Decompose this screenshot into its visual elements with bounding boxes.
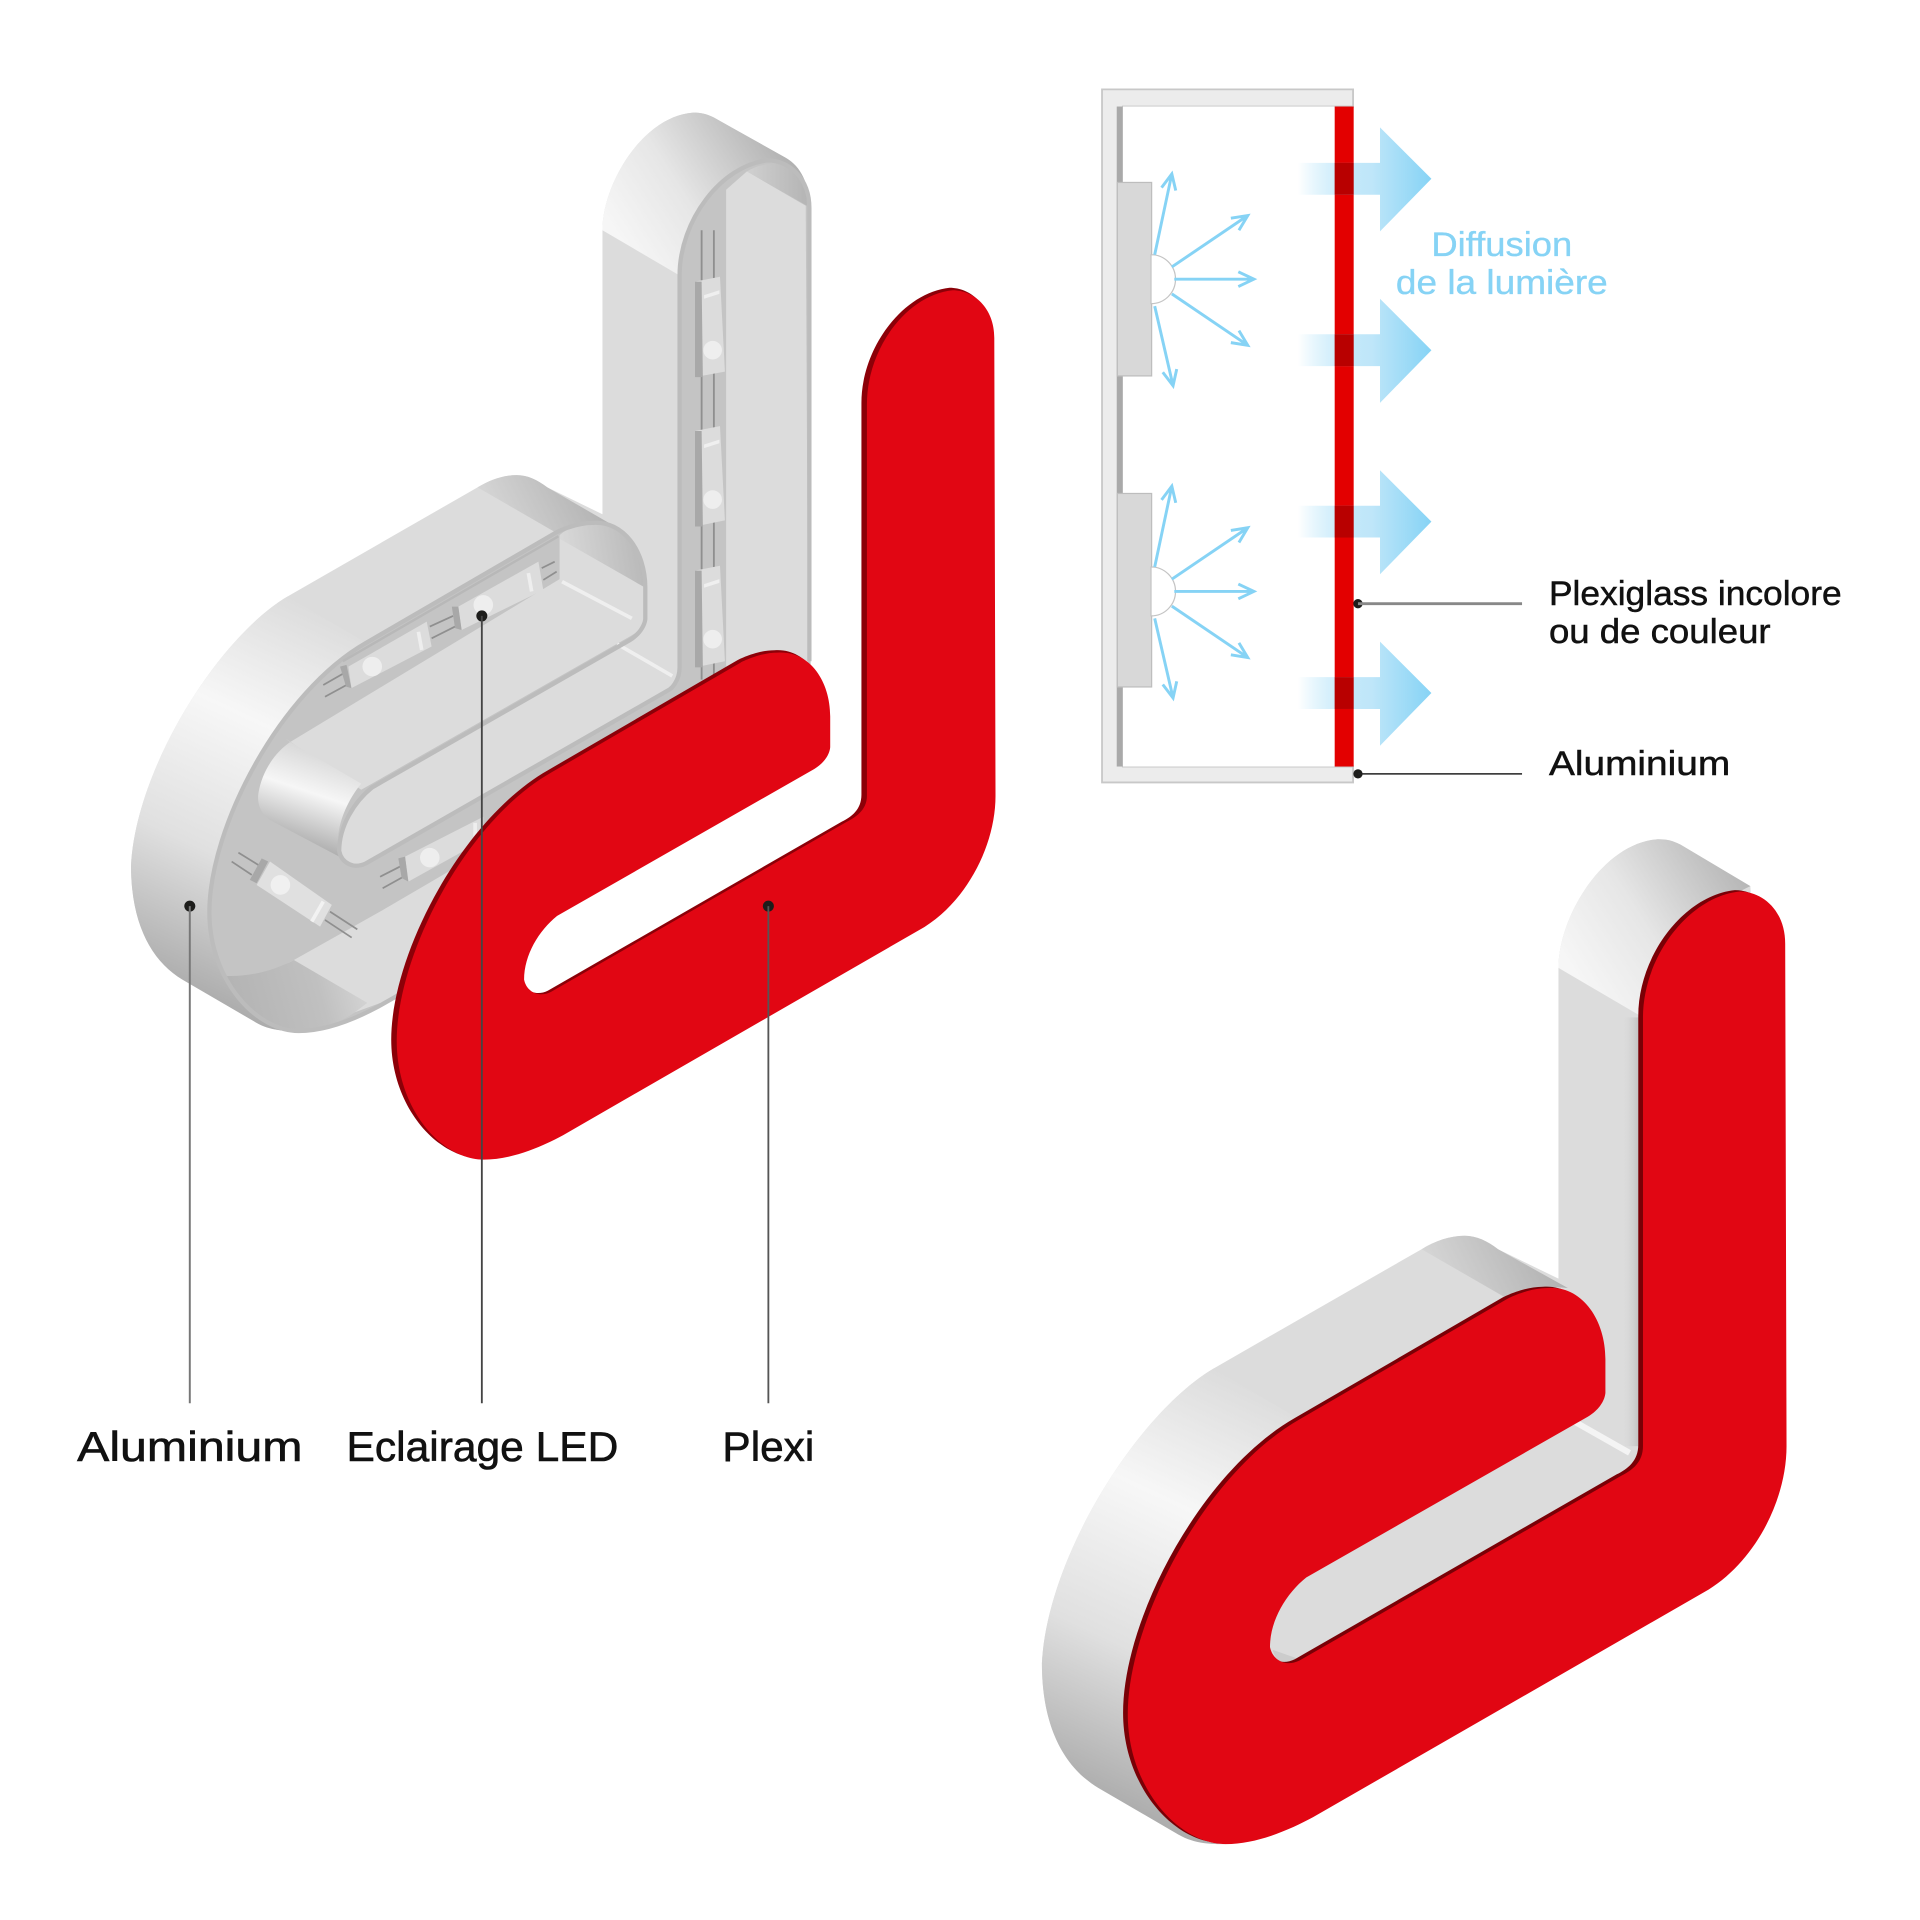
red face [1123, 890, 1787, 1844]
lower curved floor [224, 960, 367, 1031]
red plexiglass bar [1335, 107, 1354, 767]
vertical back wall [726, 171, 808, 667]
label: Plexiglass incolore ou de couleur: Plexiglass incolore [1549, 575, 1842, 613]
label: Aluminium section: Aluminium [1549, 745, 1730, 783]
exploded letter: aluminium box with LEDs [131, 113, 996, 1160]
callout line: Aluminium section [1353, 769, 1522, 779]
LED module A [340, 622, 432, 688]
curved top of arm [1422, 1236, 1568, 1299]
callout line: Eclairage LED [476, 610, 487, 1403]
callout line: Plexiglass [1353, 599, 1522, 608]
lower inner floor [230, 851, 514, 1032]
top inner curved wall [747, 164, 807, 206]
label: Aluminium: Aluminium [77, 1423, 302, 1470]
label: Diffusion de la lumière [1396, 226, 1608, 302]
notch wall [258, 742, 364, 867]
LED module 3 [695, 566, 725, 667]
extrusion body [1042, 839, 1787, 1844]
wall shading [1622, 1017, 1643, 1446]
label: Plexiglass incolore ou de couleur: ou de couleur [1549, 613, 1771, 651]
darker strip along upper band [343, 536, 558, 661]
LED strip arm top [323, 562, 557, 697]
inner curved wall of arm end [560, 523, 645, 588]
LED module B [452, 562, 543, 630]
highlights of the arm [562, 582, 672, 676]
label: Plexi: Plexi [722, 1423, 814, 1470]
callout line: Plexi [763, 901, 774, 1403]
diffusion arrow 2 [1298, 299, 1431, 403]
curved top of vertical [1558, 839, 1750, 1017]
callout line: Aluminium [184, 901, 195, 1403]
label: Diffusion de la lumière: de la lumière [1396, 264, 1608, 302]
curved outer left [1042, 1368, 1300, 1844]
LED module lower [1117, 493, 1176, 687]
LED module C [380, 817, 483, 888]
label: Plexiglass incolore ou de couleur [1549, 575, 1842, 651]
label: Diffusion de la lumière: Diffusion [1431, 226, 1572, 264]
interior [1123, 107, 1335, 767]
diffusion arrow 4 [1298, 642, 1431, 746]
light rays upper [1155, 174, 1254, 386]
diffusion arrow 3 [1298, 470, 1431, 574]
LED strip vertical [695, 230, 725, 680]
LED module 1 [695, 277, 725, 377]
LED module 2 [695, 426, 725, 527]
aluminium casing [1102, 89, 1353, 782]
aluminium box body [131, 113, 811, 1031]
inner back strip [1117, 107, 1123, 767]
notch tip shading [1273, 1650, 1300, 1665]
slot highlight [1571, 1419, 1630, 1453]
rim strokes of opening [209, 160, 809, 1031]
red plexi front [391, 288, 996, 1160]
diffusion arrow 1 [1298, 127, 1431, 231]
cross-section diagram [1102, 89, 1431, 782]
LED module upper [1117, 182, 1176, 376]
light rays lower [1155, 486, 1254, 698]
assembled letter [1042, 839, 1787, 1844]
LED module D [232, 853, 357, 938]
label: Eclairage LED: Eclairage LED [347, 1423, 618, 1470]
inner back plate of the arm [285, 536, 645, 790]
